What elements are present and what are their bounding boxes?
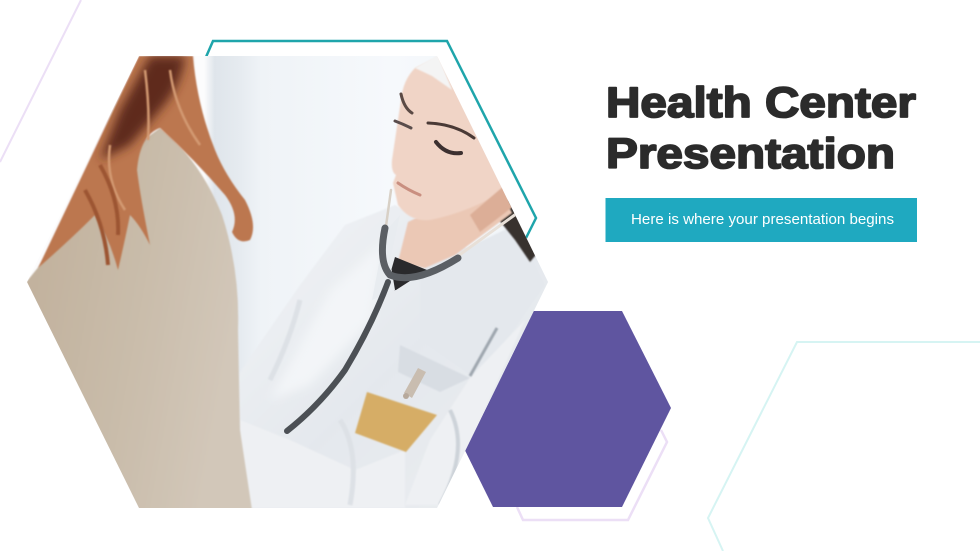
patient hair: [38, 56, 253, 270]
patient sweater: [20, 128, 252, 510]
doctor cap: [415, 55, 452, 90]
ID badge and clip: [355, 368, 437, 452]
teal hexagon outline: [206, 41, 536, 238]
doctor face: [391, 58, 503, 220]
photo background: [204, 56, 534, 451]
subtitle banner: [606, 198, 917, 242]
subtitle text: Here is where your presentation begins: [631, 212, 894, 228]
title line 1: Health Center: [606, 79, 916, 127]
collar: [388, 269, 395, 292]
hexagon photo: doctor and patient: [20, 55, 560, 520]
decorative outline: lilac top left: [0, 0, 81, 162]
doctor coat: [262, 206, 548, 508]
decorative outline: lilac behind purple hexagon: [517, 430, 667, 520]
title: [606, 79, 916, 178]
purple hexagon: [444, 311, 671, 507]
black top: [392, 257, 427, 290]
doctor hair at neck: [500, 200, 536, 263]
doctor neck: [398, 198, 513, 268]
brows, eyes and lips: [395, 94, 474, 195]
stethoscope: [287, 190, 516, 431]
decorative outline: pale teal bottom right: [708, 342, 980, 551]
title line 2: Presentation: [606, 130, 895, 178]
